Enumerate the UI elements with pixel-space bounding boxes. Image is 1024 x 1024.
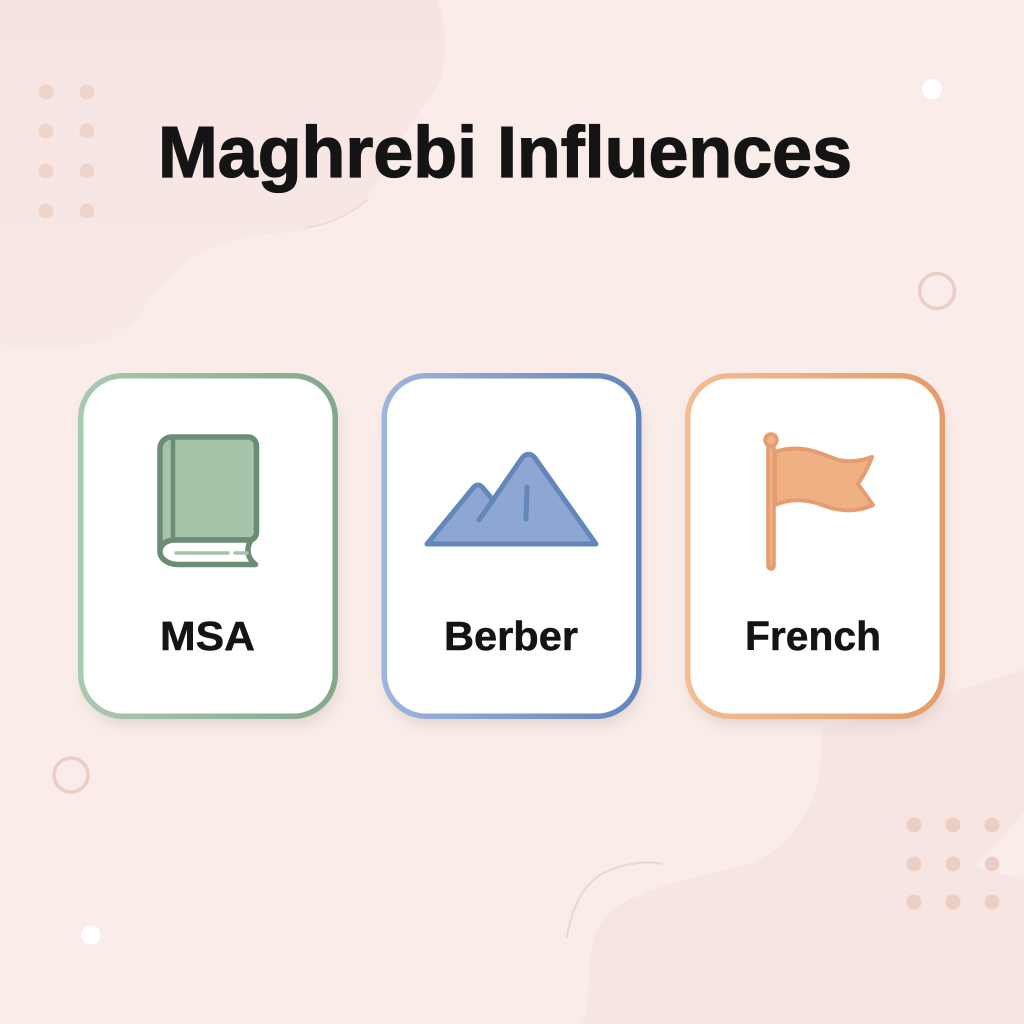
label: French: French bbox=[745, 613, 881, 659]
decorative curve: lower bbox=[567, 862, 662, 937]
panel: French card bbox=[688, 376, 944, 724]
decorative curve: upper bbox=[307, 200, 367, 227]
icon: book bbox=[160, 437, 256, 564]
label: MSA: MSA bbox=[160, 613, 255, 659]
icon: mountains bbox=[427, 454, 596, 544]
decorative dots: bottom right bbox=[906, 818, 1000, 910]
decorative white dot: upper right bbox=[922, 79, 942, 99]
decorative white dot: lower left bbox=[82, 926, 100, 944]
panel: MSA card bbox=[81, 376, 338, 724]
decorative dots: top left bbox=[38, 84, 94, 218]
decorative ring: lower left bbox=[54, 758, 88, 792]
icon: flag bbox=[765, 434, 873, 566]
label: Berber: Berber bbox=[444, 613, 578, 659]
title: Maghrebi Influences bbox=[158, 113, 852, 193]
panel: Berber card bbox=[384, 376, 641, 724]
decorative ring: upper right bbox=[920, 274, 954, 308]
